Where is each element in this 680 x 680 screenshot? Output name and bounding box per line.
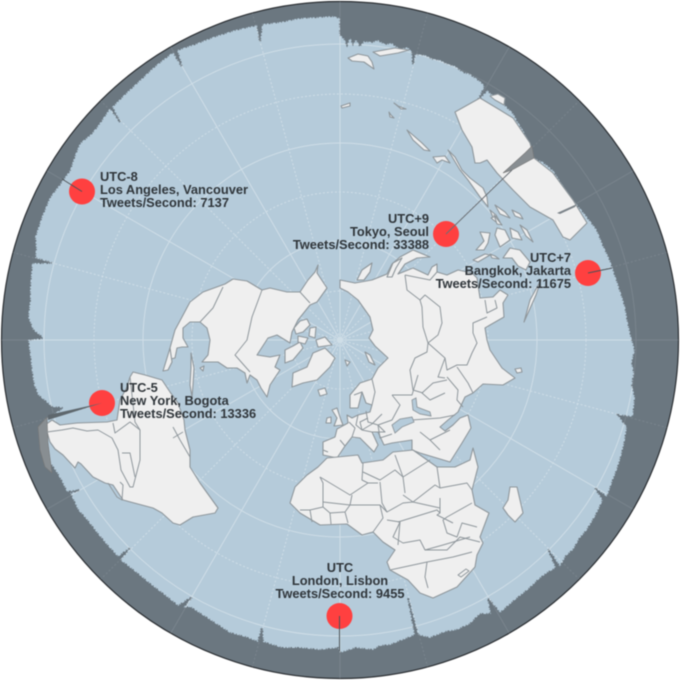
label: UTC-8: Los Angeles, Vancouver (100, 182, 248, 197)
North America (170, 265, 327, 397)
UK and Ireland (326, 408, 343, 426)
label: UTC+9: Tweets/Second: 33388 (293, 237, 429, 252)
New Zealand strips (348, 48, 409, 69)
connector: UTC+9 (446, 170, 512, 234)
Africa (290, 448, 489, 598)
Greenland (292, 348, 335, 387)
Black Sea (392, 417, 414, 433)
connector: UTC (338, 616, 340, 651)
label: UTC+7: Tweets/Second: 11675 (436, 276, 571, 291)
label: UTC-5: UTC-5 (120, 380, 158, 395)
label: UTC-5: New York, Bogota (120, 393, 230, 408)
label: UTC: London, Lisbon (292, 573, 388, 588)
label: UTC+7: Bangkok, Jakarta (465, 263, 572, 278)
long Caribbean island (190, 353, 194, 397)
label: UTC+9: Tokyo, Seoul (350, 224, 429, 239)
connector: UTC-5 wedge (48, 403, 102, 420)
Southeast Asian islands (473, 210, 541, 322)
Eurasia (323, 250, 515, 462)
connector: UTC-8 (62, 179, 82, 192)
Central America tail (163, 348, 172, 371)
Sri Lanka (515, 368, 522, 373)
continents (38, 48, 587, 598)
fold in South America map (38, 417, 52, 473)
label: UTC-5: Tweets/Second: 13336 (120, 406, 256, 421)
label: UTC: UTC (327, 560, 353, 575)
label: UTC+9: UTC+9 (388, 211, 429, 226)
red marker: UTC-8 (69, 178, 95, 204)
Madagascar (503, 487, 523, 522)
label: UTC-8: Tweets/Second: 7137 (100, 195, 229, 210)
label: UTC: Tweets/Second: 9455 (276, 586, 404, 601)
label: UTC-8: UTC-8 (100, 169, 138, 184)
label: UTC+7: UTC+7 (530, 250, 571, 265)
South America (38, 372, 218, 525)
Canadian Arctic islands (285, 319, 332, 363)
African borders (300, 477, 323, 510)
small islands near Caribbean (200, 366, 204, 371)
Asian borders (405, 275, 442, 343)
map fold in Australia (503, 146, 534, 173)
Arctic and Russian coast islands (345, 258, 402, 366)
European borders (349, 422, 355, 437)
connector: UTC+7 (588, 268, 612, 273)
Pacific island chain (341, 103, 510, 225)
red marker: UTC-5 (89, 390, 115, 416)
red marker: UTC+9 (433, 221, 459, 247)
Caspian Sea (412, 398, 431, 416)
red marker: UTC (326, 603, 352, 629)
Iceland (318, 388, 327, 396)
red marker: UTC+7 (575, 260, 601, 286)
Australia (455, 98, 587, 240)
Tasmania strip (490, 94, 505, 105)
